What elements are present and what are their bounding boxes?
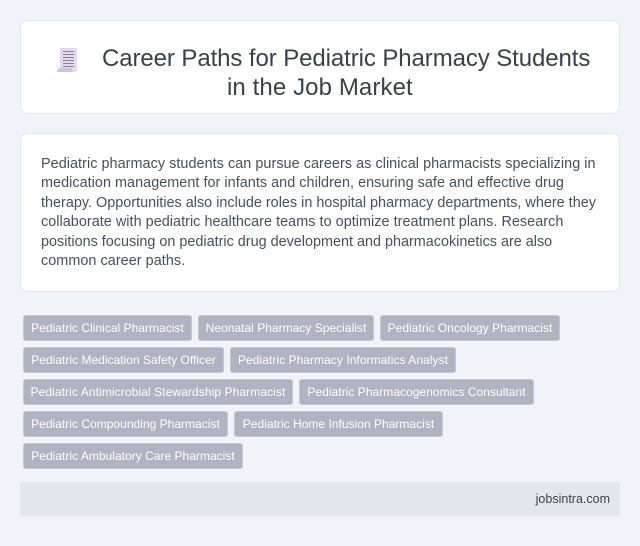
tag: Pediatric Ambulatory Care Pharmacist <box>31 449 235 463</box>
tag <box>23 411 228 437</box>
description text: collaborate with pediatric healthcare teams to optimize treatment plans. Research <box>41 214 563 230</box>
tag: Pediatric Clinical Pharmacist <box>31 321 184 335</box>
tag: Pediatric Home Infusion Pharmacist <box>243 417 434 431</box>
icon: document scroll <box>57 48 77 72</box>
tag <box>299 379 534 405</box>
footer source: jobsintra.com <box>536 492 610 506</box>
description text: medication management for infants and children, ensuring safe and effective drug <box>41 175 564 191</box>
tag <box>23 347 224 373</box>
tag <box>198 315 374 341</box>
title card <box>20 20 620 114</box>
tag: Pediatric Pharmacogenomics Consultant <box>307 385 526 399</box>
tag <box>23 315 192 341</box>
tag: Pediatric Oncology Pharmacist <box>388 321 552 335</box>
tag: Pediatric Medication Safety Officer <box>31 353 216 367</box>
description text <box>41 156 596 269</box>
title: Career Paths for Pediatric Pharmacy Students <box>102 45 590 72</box>
tag: Pediatric Compounding Pharmacist <box>31 417 220 431</box>
tag <box>230 347 456 373</box>
description text: common career paths. <box>41 253 185 269</box>
tag <box>234 411 443 437</box>
tag: Pediatric Pharmacy Informatics Analyst <box>238 353 448 367</box>
footer bar <box>20 482 620 516</box>
description card <box>20 133 620 292</box>
tag <box>380 315 560 341</box>
title <box>102 45 590 101</box>
tag: Pediatric Antimicrobial Stewardship Pharmacist <box>31 385 285 399</box>
description text: positions focusing on pediatric drug development and pharmacokinetics are also <box>41 234 552 250</box>
title: in the Job Market <box>227 74 413 101</box>
tag <box>23 379 293 405</box>
tag <box>23 443 243 469</box>
description text: therapy. Opportunities also include roles in hospital pharmacy departments, where they <box>41 195 596 211</box>
description text: Pediatric pharmacy students can pursue careers as clinical pharmacists specializing in <box>41 156 596 172</box>
tag: Neonatal Pharmacy Specialist <box>206 321 366 335</box>
